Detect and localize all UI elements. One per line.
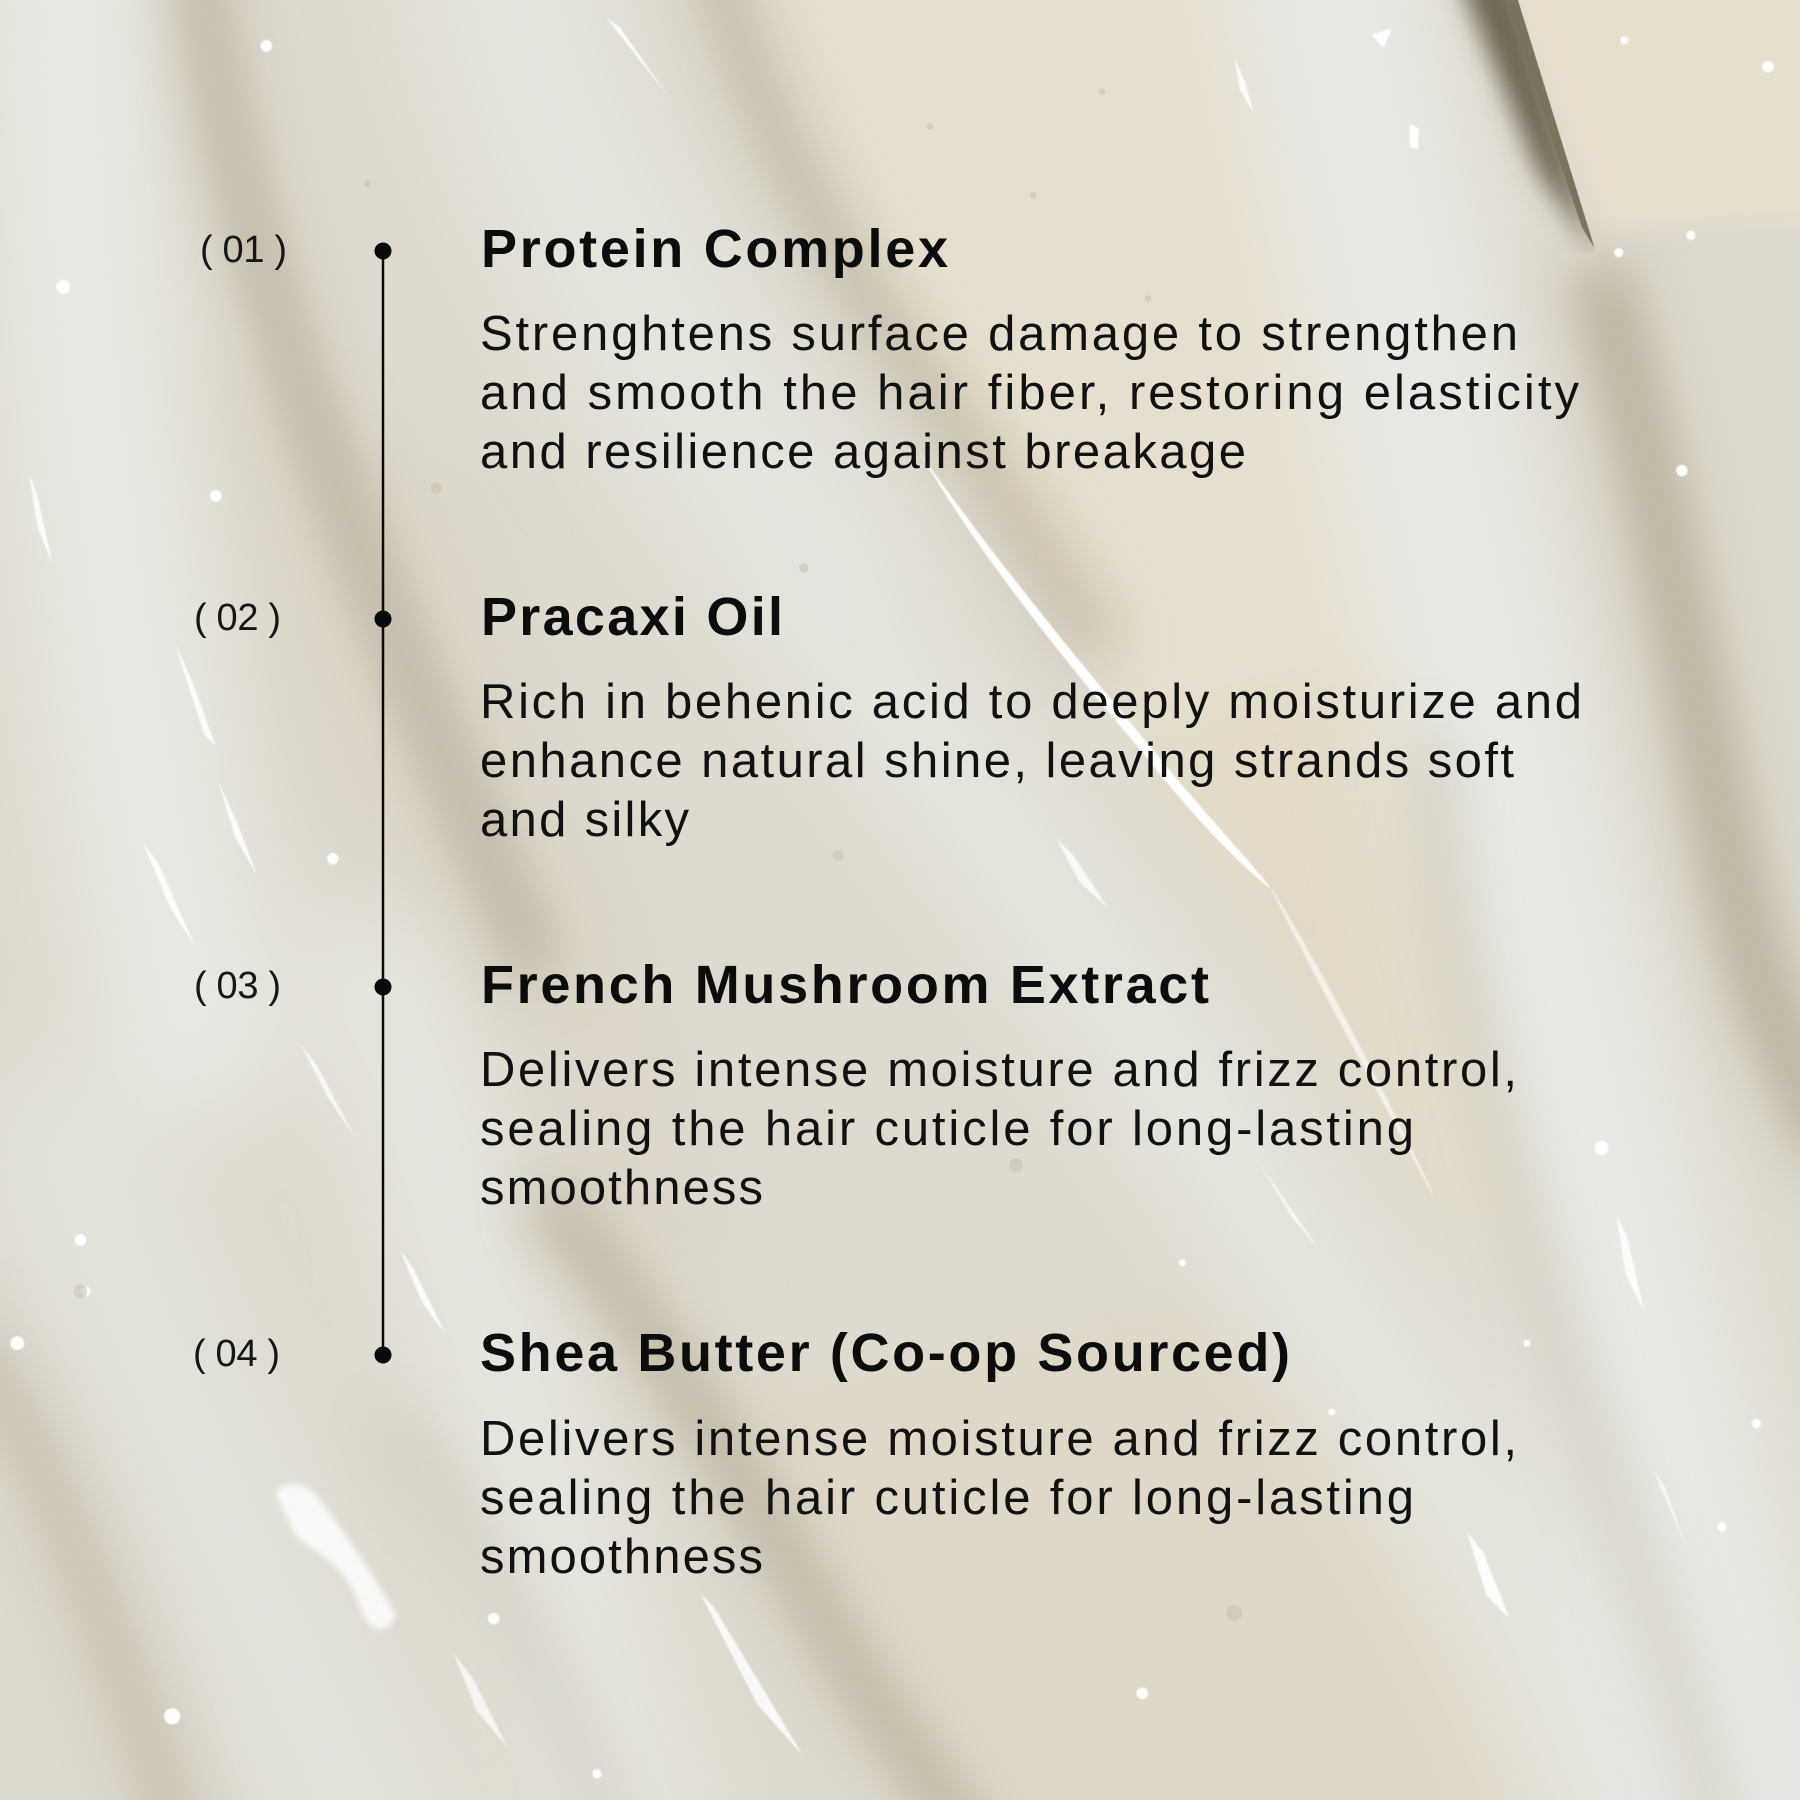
description 03: smoothness xyxy=(480,1161,763,1215)
description 01: and smooth the hair fiber, restoring elasticity xyxy=(480,366,1580,420)
timeline dot 03 xyxy=(374,978,392,996)
description 04: sealing the hair cuticle for long-lasting xyxy=(480,1471,1414,1525)
description 02 xyxy=(480,675,1582,847)
ingredient 02 xyxy=(194,587,1582,847)
description 04: smoothness xyxy=(480,1530,763,1584)
heading: Shea Butter (Co-op Sourced): Shea Butter (Co-op Sourced) xyxy=(480,1323,1290,1383)
heading: French Mushroom Extract: French Mushroom Extract xyxy=(481,955,1209,1015)
timeline line xyxy=(382,251,384,1355)
heading: Protein Complex: Protein Complex xyxy=(481,219,948,279)
number 03: ( 03 ) xyxy=(194,965,281,1007)
description 04: Delivers intense moisture and frizz control, xyxy=(480,1412,1517,1466)
description 02: and silky xyxy=(480,793,690,847)
ingredient 03 xyxy=(194,955,1517,1215)
description 04 xyxy=(480,1412,1517,1584)
description 03 xyxy=(480,1043,1517,1215)
timeline dot 02 xyxy=(374,610,392,628)
ingredient 01 xyxy=(200,219,1580,479)
glint: large highlight lower left xyxy=(276,1484,396,1630)
timeline dot 04 xyxy=(374,1346,392,1364)
description 01 xyxy=(480,307,1580,479)
description 01: and resilience against breakage xyxy=(480,425,1246,479)
description 01: Strenghtens surface damage to strengthen xyxy=(480,307,1518,361)
number 04: ( 04 ) xyxy=(193,1333,280,1375)
heading: Pracaxi Oil: Pracaxi Oil xyxy=(481,587,783,647)
ingredient 04 xyxy=(193,1323,1517,1584)
description 02: Rich in behenic acid to deeply moisturize and xyxy=(480,675,1582,729)
description 03: sealing the hair cuticle for long-lasting xyxy=(480,1102,1414,1156)
description 03: Delivers intense moisture and frizz control, xyxy=(480,1043,1517,1097)
timeline dot 01 xyxy=(374,242,392,260)
number 01: ( 01 ) xyxy=(200,229,287,271)
number 02: ( 02 ) xyxy=(194,597,281,639)
top right beige corner xyxy=(1458,0,1800,255)
description 02: enhance natural shine, leaving strands soft xyxy=(480,734,1514,788)
